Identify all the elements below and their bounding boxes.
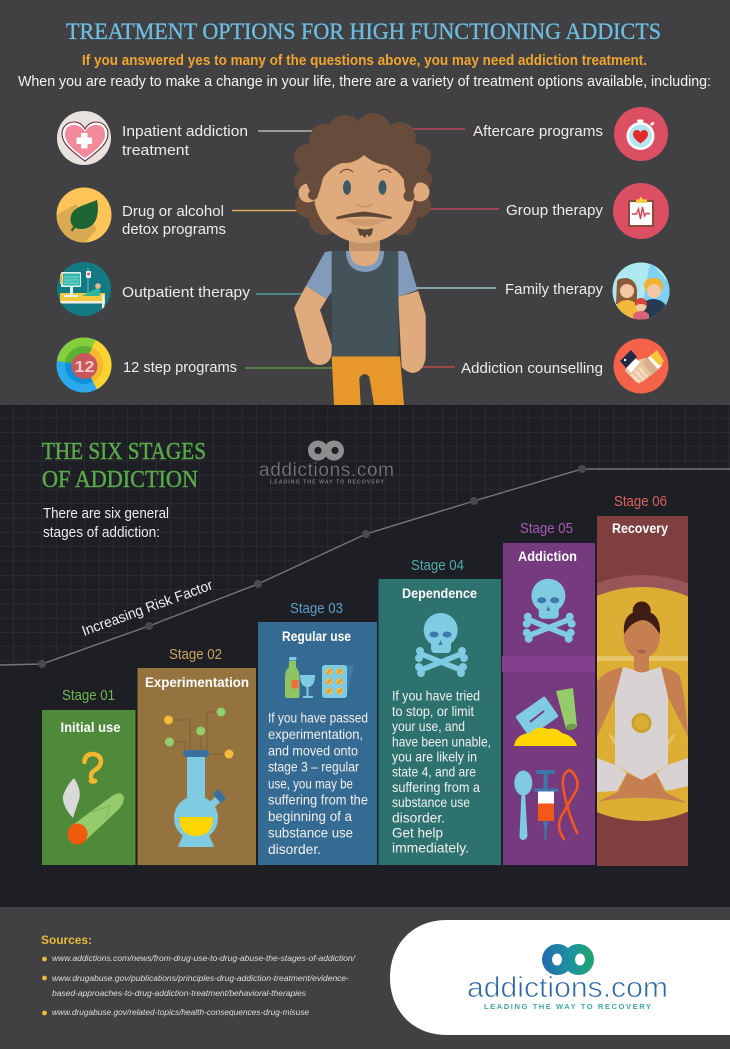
label: Outpatient therapy <box>122 285 251 301</box>
icon: 12 circle: 12 <box>74 359 95 376</box>
label: treatment <box>122 143 189 159</box>
icon: heart with cross <box>57 111 111 165</box>
heading: OF ADDICTION <box>42 467 198 493</box>
moustache <box>336 212 392 220</box>
stage 06 <box>597 496 688 866</box>
body text: you are likely in <box>392 750 477 765</box>
logo: addictions.com <box>467 972 668 1004</box>
icon: family <box>612 262 670 320</box>
stage label: Stage 02 <box>169 647 222 663</box>
ears and face <box>298 184 318 202</box>
character <box>294 113 432 405</box>
item: aftercare programs <box>473 107 668 161</box>
body text: experimentation, <box>268 727 363 742</box>
label: Drug or alcohol <box>122 204 224 220</box>
stage 01 <box>42 688 136 865</box>
icon: spoon, syringe and ribbon <box>514 770 578 840</box>
icon: cigar with question mark <box>63 754 124 844</box>
intro text: stages of addiction: <box>43 525 160 541</box>
icon: handshake <box>614 338 668 394</box>
item: inpatient addiction treatment <box>57 111 248 165</box>
stage 03 <box>258 601 377 865</box>
stage 04 <box>378 558 501 865</box>
neck <box>349 235 380 259</box>
title: TREATMENT OPTIONS FOR HIGH FUNCTIONING ADDICTS <box>66 19 661 45</box>
body text: If you have passed <box>268 710 368 725</box>
illustration: meditating woman <box>597 575 688 821</box>
label: Aftercare programs <box>473 124 603 140</box>
risk line <box>0 465 730 668</box>
sources list: based-approaches-to-drug-addiction-treatment/behavioral-therapies <box>52 988 307 998</box>
panel: treatment options <box>18 23 710 405</box>
item: detox programs <box>56 188 226 244</box>
stage label: Stage 01 <box>62 688 115 704</box>
pants <box>332 356 404 405</box>
icon: clipboard <box>613 183 669 239</box>
body text: substance use <box>392 795 470 810</box>
icon: stopwatch <box>614 107 668 161</box>
body text: to stop, or limit <box>392 704 474 719</box>
icon: leaf <box>56 188 112 244</box>
body text: and moved onto <box>268 743 358 758</box>
panel: footer <box>0 907 730 1049</box>
stage label: Stage 05 <box>520 521 573 537</box>
body text: state 4, and are <box>392 765 476 780</box>
item: 12 step programs <box>56 337 237 392</box>
eyes <box>343 180 351 195</box>
hair back <box>294 113 432 235</box>
bar heading: Addiction <box>518 549 577 564</box>
sources list: www.drugabuse.gov/related-topics/health-consequences-drug-misuse <box>52 1007 309 1017</box>
connector lines <box>232 129 499 368</box>
icon: bottle, glass and pills <box>285 657 354 698</box>
body text: substance use <box>268 826 353 841</box>
bar heading: Recovery <box>612 521 668 536</box>
body text: suffering from a <box>392 780 480 795</box>
body text: have been unable, <box>392 734 491 749</box>
label: 12 step programs <box>123 360 237 376</box>
body text: suffering from the <box>268 793 368 808</box>
left arm <box>294 286 332 365</box>
body text: Get help <box>392 825 443 840</box>
stage 02 <box>138 647 256 865</box>
intro text: There are six general <box>43 506 169 522</box>
goatee <box>357 228 373 238</box>
watermark logo <box>259 440 394 486</box>
item: outpatient therapy <box>57 262 251 316</box>
heading: THE SIX STAGES <box>42 439 206 465</box>
icon: skull and crossbones <box>415 613 468 677</box>
stage label: Stage 04 <box>411 558 464 574</box>
left sleeve <box>306 251 332 299</box>
item: family therapy <box>505 262 675 322</box>
intro text: When you are ready to make a change in your life, there are a variety of treatment options available, including: <box>18 73 711 90</box>
body text: beginning of a <box>268 809 352 824</box>
right arm <box>398 291 426 373</box>
sources list: www.addictions.com/news/from-drug-use-to-drug-abuse-the-stages-of-addiction/ <box>52 953 357 963</box>
sources heading: Sources: <box>41 933 92 947</box>
brows <box>340 169 391 173</box>
item: addiction counselling <box>461 338 668 394</box>
risk label: Increasing Risk Factor <box>80 577 215 640</box>
icon: razor and powder <box>514 688 577 746</box>
label: Addiction counselling <box>461 361 603 377</box>
bar heading: Experimentation <box>145 675 249 690</box>
icon: hospital bed <box>57 262 111 316</box>
body text: disorder. <box>392 810 445 825</box>
watermark logo: LEADING THE WAY TO RECOVERY <box>270 480 385 486</box>
sources list <box>42 953 357 1017</box>
bar heading: Dependence <box>402 586 477 601</box>
body text: If you have tried <box>392 689 480 704</box>
shirt <box>332 251 398 357</box>
body text: use, you may be <box>268 776 353 791</box>
subtitle: If you answered yes to many of the questions above, you may need addiction treatment. <box>82 53 647 69</box>
body text: immediately. <box>392 841 469 856</box>
logo <box>467 944 668 1011</box>
bar heading: Regular use <box>282 629 351 644</box>
body text: stage 3 – regular <box>268 760 359 775</box>
sources list: www.drugabuse.gov/publications/principles-drug-addiction-treatment/evidence- <box>52 973 349 983</box>
logo: LEADING THE WAY TO RECOVERY <box>484 1002 651 1011</box>
stage 05 <box>502 521 595 865</box>
panel: six stages <box>0 405 730 907</box>
label: Inpatient addiction <box>122 124 248 140</box>
label: Group therapy <box>506 203 604 219</box>
watermark logo: addictions.com <box>259 460 394 481</box>
label: detox programs <box>122 222 226 238</box>
icon: 12 circle <box>56 337 112 392</box>
logo pill <box>390 920 730 1035</box>
icon: bong <box>164 708 234 847</box>
bar heading: Initial use <box>60 720 121 735</box>
nose <box>357 204 372 207</box>
stage label: Stage 03 <box>290 601 343 617</box>
body text: disorder. <box>268 842 321 857</box>
mouth <box>345 219 387 226</box>
label: Family therapy <box>505 282 604 298</box>
icon: skull and crossbones <box>523 579 576 643</box>
collar <box>346 251 384 272</box>
stage label: Stage 06 <box>614 494 667 510</box>
item: group therapy <box>506 183 669 239</box>
right sleeve <box>398 251 418 297</box>
hair front <box>304 122 424 197</box>
body text: your use, and <box>392 719 465 734</box>
